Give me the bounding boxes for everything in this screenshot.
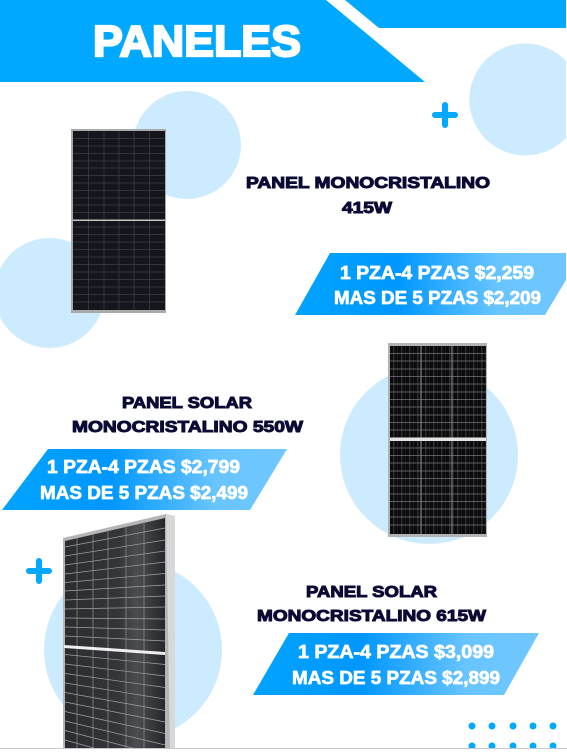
- background circle: behind panel 415W: [133, 91, 241, 199]
- price banner: 550W: [2, 449, 287, 510]
- background circle: top right: [469, 44, 566, 156]
- background circle: behind panel 615W: [44, 561, 222, 739]
- panel image: 415W: [71, 129, 166, 313]
- panel image: 550W: [388, 343, 487, 537]
- heading: panel 615W: MONOCRISTALINO 615W: [257, 608, 487, 625]
- title: PANELES: [93, 17, 301, 66]
- header banner: [0, 0, 425, 82]
- price banner: 415W: 1 PZA-4 PZAS $2,259: [340, 263, 534, 283]
- icon: plus top: [435, 105, 455, 125]
- heading: panel 615W: [257, 584, 487, 625]
- icon: plus left: [29, 561, 49, 581]
- background circle: behind panel 550W: [340, 366, 518, 544]
- heading: panel 550W: PANEL SOLAR: [122, 395, 253, 412]
- heading: panel 550W: MONOCRISTALINO 550W: [72, 419, 304, 436]
- heading: panel 415W: [246, 175, 490, 217]
- price banner: 615W: MAS DE 5 PZAS $2,899: [292, 668, 500, 688]
- heading: panel 415W: 415W: [342, 200, 393, 217]
- heading: panel 550W: [72, 395, 304, 436]
- price banner: 550W: MAS DE 5 PZAS $2,499: [40, 483, 248, 503]
- panel image: 615W: [63, 514, 175, 752]
- price banner: 415W: MAS DE 5 PZAS $2,209: [334, 288, 541, 308]
- price banner: 415W: [295, 253, 566, 315]
- price banner: 615W: 1 PZA-4 PZAS $3,099: [298, 642, 494, 662]
- heading: panel 615W: PANEL SOLAR: [306, 584, 438, 601]
- heading: panel 415W: PANEL MONOCRISTALINO: [246, 175, 490, 192]
- background circle: left: [0, 238, 104, 348]
- price banner: 615W: [253, 633, 539, 695]
- decorative dots grid: [468, 722, 556, 750]
- header corner bar: [345, 0, 566, 28]
- price banner: 550W: 1 PZA-4 PZAS $2,799: [47, 457, 240, 477]
